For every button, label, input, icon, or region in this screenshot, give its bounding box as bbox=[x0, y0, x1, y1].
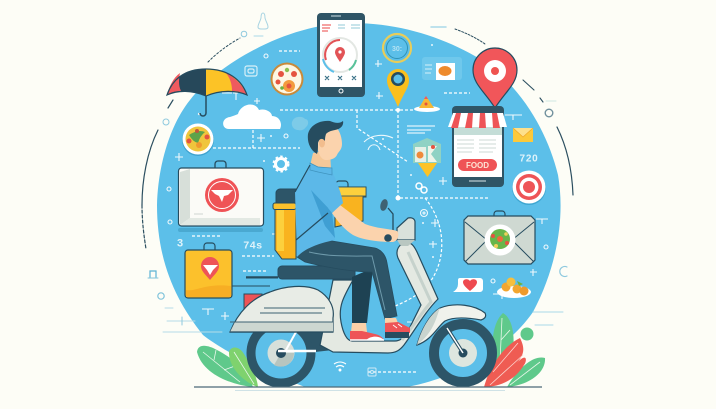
storefront phone bbox=[448, 106, 507, 187]
icon: clock: 30: bbox=[392, 46, 402, 53]
ear bbox=[319, 138, 325, 148]
tail light bbox=[244, 294, 262, 315]
leaves left bbox=[197, 346, 258, 387]
icon: target bbox=[512, 170, 546, 205]
white delivery box bbox=[178, 161, 264, 232]
yellow bag bbox=[185, 243, 232, 298]
icon: speed lines bbox=[407, 126, 435, 133]
far leg bbox=[352, 268, 373, 324]
second yellow box behind rider bbox=[335, 181, 366, 227]
front fender bbox=[417, 305, 486, 345]
label: 74s: 74s bbox=[243, 240, 263, 252]
icon: wifi bbox=[334, 362, 346, 371]
storefront phone: FOOD bbox=[466, 161, 489, 170]
head bbox=[316, 125, 342, 160]
front shoe bbox=[385, 318, 410, 338]
label: 3: 3 bbox=[177, 238, 183, 250]
rear wheel bbox=[251, 323, 311, 383]
leaves and carrots right bbox=[484, 313, 545, 387]
hair bbox=[308, 121, 343, 154]
icon: small device bbox=[368, 368, 376, 376]
neck bbox=[310, 150, 331, 170]
big red location pin bbox=[473, 48, 517, 108]
icon: small card glyph bbox=[245, 66, 257, 76]
food info card bbox=[422, 57, 462, 80]
headlight bbox=[397, 218, 415, 240]
icon: chain link bbox=[416, 183, 427, 193]
awning bbox=[448, 113, 507, 128]
icon: pizza bbox=[270, 62, 304, 96]
rider bbox=[273, 121, 410, 340]
icon: pizza slice on plate bbox=[414, 96, 440, 112]
big envelope with salad bbox=[464, 211, 535, 264]
icon: salad plate bbox=[182, 124, 214, 156]
seat bbox=[278, 266, 355, 279]
icon: map card bbox=[413, 138, 441, 177]
backpack bbox=[273, 189, 296, 259]
straps bbox=[295, 165, 328, 240]
icon: heart speech bubble bbox=[453, 278, 483, 292]
ground line bbox=[194, 386, 542, 388]
icon: small bottle outline bbox=[258, 13, 268, 29]
dashed route lines bbox=[192, 51, 490, 372]
floor and front shield bbox=[320, 243, 438, 353]
icon: faint tree bbox=[292, 117, 308, 130]
arm bbox=[332, 205, 398, 242]
icon: gear bbox=[274, 156, 288, 172]
front wheel bbox=[434, 324, 492, 382]
icon: cloud bbox=[223, 104, 281, 129]
scooter bbox=[230, 198, 492, 383]
rear body bbox=[230, 286, 333, 332]
phone with gauge bbox=[317, 13, 365, 97]
icon: yellow pin bbox=[387, 69, 409, 107]
fork bbox=[447, 328, 463, 353]
number 720: 720 bbox=[519, 154, 539, 164]
front leg bbox=[297, 240, 397, 319]
outer decorative arcs bbox=[142, 27, 573, 332]
icon: clock bbox=[383, 34, 411, 62]
icon: yellow envelope bbox=[513, 128, 533, 142]
shirt bbox=[295, 165, 343, 257]
handlebar and mirror bbox=[388, 208, 393, 232]
icon: umbrella bbox=[167, 69, 247, 116]
small white decorations bbox=[167, 54, 548, 327]
back shoe bbox=[350, 331, 384, 340]
blue background blob bbox=[157, 23, 561, 387]
icon: dumpling plate bbox=[497, 278, 531, 298]
swing arm bbox=[307, 332, 333, 352]
handlebar grip bbox=[384, 234, 392, 242]
